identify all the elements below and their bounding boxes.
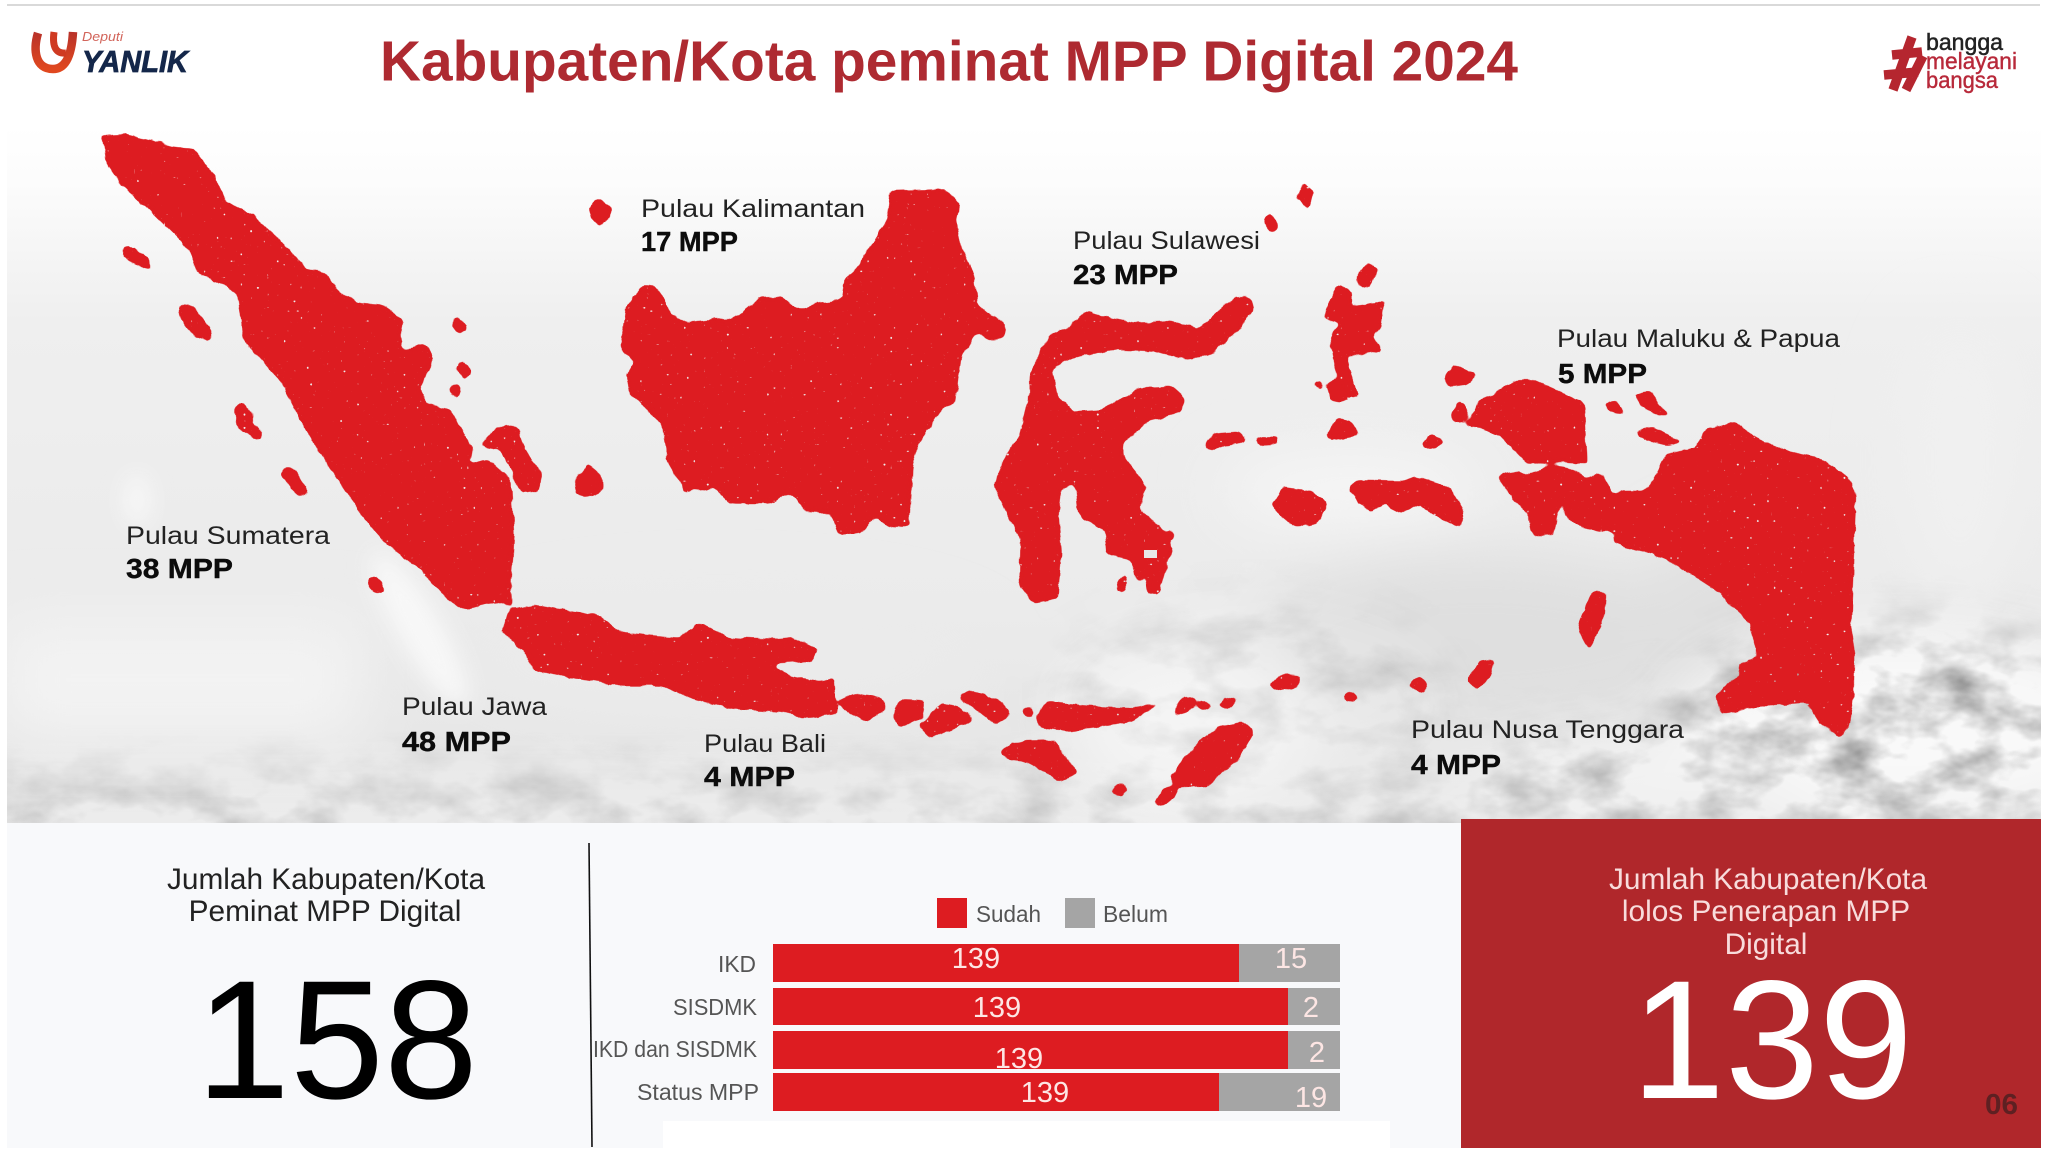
detail: bay in south-east Sulawesi: [1144, 550, 1157, 558]
label: Pulau Kalimantan: Pulau Kalimantan: [641, 195, 865, 223]
divider: [589, 843, 592, 1147]
island group: Bali and west Nusa Tenggara: [839, 692, 1024, 759]
bar row: IKD: IKD: [718, 951, 756, 977]
logo: Deputi Yanlik: YANLIK: [82, 44, 190, 79]
panel: jumlah lolos: [1461, 819, 2041, 1148]
bar row: Status MPP: [637, 1073, 1340, 1114]
logo: bangga melayani bangsa: melayani: [1926, 48, 2017, 74]
island group: south Papua: [1667, 560, 1853, 736]
label: Pulau Sumatera: Pulau Sumatera: [126, 522, 330, 550]
bar row: IKD: 15: [1275, 943, 1307, 975]
panel: jumlah peminat: [167, 863, 485, 1134]
bar row: Status MPP: 19: [1295, 1082, 1327, 1114]
label: Pulau Jawa: 48 MPP: [402, 726, 511, 757]
title: Kabupaten/Kota peminat MPP Digital 2024: [380, 30, 1518, 94]
panel: jumlah peminat: 158: [196, 945, 478, 1134]
label: Pulau Sumatera: [126, 522, 330, 584]
label: Pulau Sulawesi: 23 MPP: [1073, 259, 1178, 290]
island group: Sulawesi: [995, 184, 1313, 602]
island group: Kalimantan: [590, 191, 1004, 534]
map of Indonesia: [103, 135, 1855, 806]
panel: lower background: [7, 823, 1461, 1148]
label: Pulau Maluku & Papua: [1557, 325, 1840, 389]
bar row: SISDMK: 139: [973, 992, 1021, 1024]
label: Pulau Nusa Tenggara: 4 MPP: [1411, 749, 1501, 780]
logo: Deputi Yanlik: Deputi: [82, 29, 124, 44]
island group: Java: [503, 606, 836, 717]
cloud texture: [7, 602, 2041, 823]
bar row: IKD dan SISDMK: 2: [1309, 1037, 1325, 1069]
label: Pulau Maluku & Papua: Pulau Maluku & Papua: [1557, 325, 1840, 353]
bar row: SISDMK: 2: [1303, 992, 1319, 1024]
logo: Deputi Yanlik: [36, 29, 190, 79]
label: Pulau Jawa: [402, 693, 547, 757]
stacked bar chart: [593, 898, 1340, 1114]
panel: jumlah peminat: Peminat MPP Digital: [189, 895, 461, 928]
island group: Maluku: [1273, 265, 1475, 526]
legend: Belum: [1103, 901, 1168, 927]
bar row: Status MPP: Status MPP: [637, 1079, 759, 1105]
panel: jumlah lolos: Digital: [1725, 928, 1807, 961]
label: Pulau Kalimantan: 17 MPP: [641, 226, 738, 257]
bar row: SISDMK: [673, 988, 1340, 1025]
island group: Papua: [1467, 382, 1855, 620]
label: Pulau Nusa Tenggara: Pulau Nusa Tenggara: [1411, 716, 1684, 744]
label: Pulau Bali: Pulau Bali: [704, 730, 826, 758]
label: Pulau Bali: 4 MPP: [704, 761, 795, 792]
panel: jumlah lolos: lolos Penerapan MPP: [1622, 895, 1910, 928]
white strip below chart: [663, 1121, 1390, 1148]
background: cloudy sky panel: [7, 235, 2041, 823]
bar row: IKD dan SISDMK: 139: [995, 1043, 1043, 1075]
legend: [937, 898, 1168, 928]
bar row: IKD: 139: [952, 943, 1000, 975]
panel: jumlah peminat: Jumlah Kabupaten/Kota: [167, 863, 485, 896]
label: Pulau Bali: [704, 730, 826, 792]
bar row: IKD dan SISDMK: [593, 1031, 1340, 1075]
label: Pulau Kalimantan: [641, 195, 865, 257]
label: Pulau Nusa Tenggara: [1411, 716, 1684, 780]
island group: east Nusa Tenggara: [1024, 592, 1604, 806]
label: Pulau Sumatera: 38 MPP: [126, 553, 233, 584]
bar row: IKD: [718, 943, 1340, 982]
label: Pulau Jawa: Pulau Jawa: [402, 693, 547, 721]
bar row: IKD dan SISDMK: IKD dan SISDMK: [593, 1036, 758, 1062]
label: Pulau Maluku & Papua: 5 MPP: [1558, 358, 1647, 389]
logo: bangga melayani bangsa: bangsa: [1926, 67, 1998, 93]
legend: Sudah: [976, 901, 1041, 927]
page number: 06: [1985, 1089, 2018, 1121]
bar row: Status MPP: 139: [1021, 1077, 1069, 1109]
island group: Sumatra: [103, 135, 601, 607]
logo: bangga melayani bangsa: [1884, 29, 2017, 93]
panel: jumlah lolos: Jumlah Kabupaten/Kota: [1609, 863, 1927, 896]
logo: bangga melayani bangsa: bangga: [1926, 29, 2003, 55]
label: Pulau Sulawesi: [1073, 227, 1260, 290]
top rule: [7, 4, 2040, 6]
panel: jumlah lolos: 139: [1631, 945, 1913, 1134]
bar row: SISDMK: SISDMK: [673, 994, 758, 1020]
label: Pulau Sulawesi: Pulau Sulawesi: [1073, 227, 1260, 255]
